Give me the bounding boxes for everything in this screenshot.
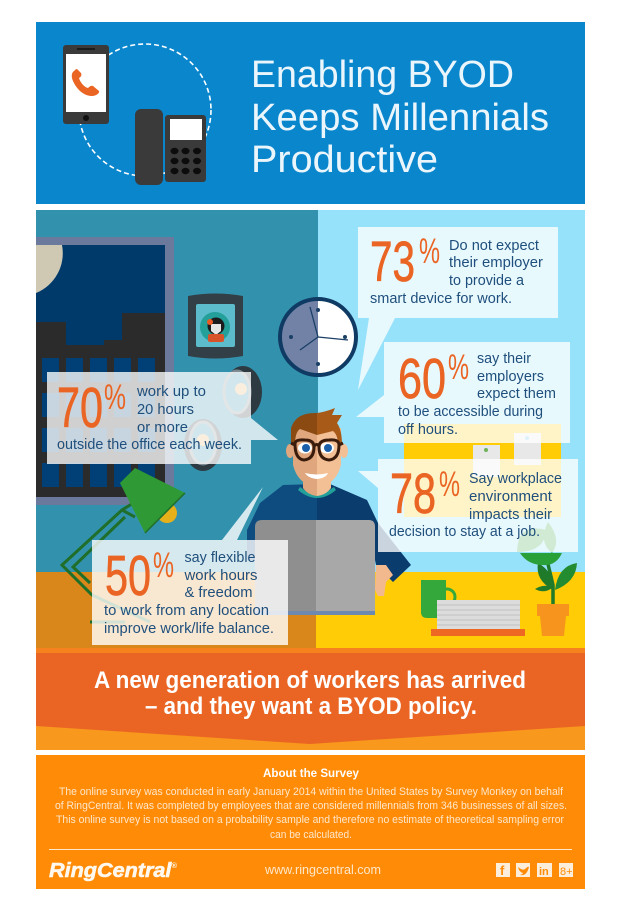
- glasses and eyes: [291, 440, 343, 460]
- callout: 60%: off hours.: [398, 422, 458, 438]
- title: [251, 54, 549, 181]
- social icons: in: [539, 866, 549, 878]
- wall clock: [280, 299, 356, 375]
- callout: 60%: [356, 342, 570, 443]
- banner: new generation of workers: – and they want a BYOD policy.: [145, 693, 477, 720]
- survey heading: About the Survey: [263, 766, 359, 780]
- callout: 70%: %: [104, 378, 126, 417]
- oval flower pictures: [184, 366, 262, 471]
- callout: 70%: outside the office each week.: [57, 437, 242, 453]
- callout: 70%: 20 hours: [137, 402, 194, 418]
- survey description: [55, 786, 567, 841]
- callout: 78%: environment: [469, 489, 552, 505]
- icon: smartphone: [63, 45, 109, 124]
- neck and head: [286, 408, 348, 496]
- callout: 78%: 78: [390, 462, 436, 526]
- hand: [375, 565, 393, 596]
- callout: 78%: [358, 459, 578, 552]
- smile: [305, 473, 328, 479]
- callout: 73%: smart device for work.: [370, 291, 512, 307]
- social icons: f: [500, 863, 505, 878]
- callout: 78%: Say workplace: [469, 471, 562, 487]
- survey description: of RingCentral. It was completed by employees that are considered millennials from 346 businesses of all sizes.: [55, 800, 567, 812]
- callout: 70%: [47, 372, 278, 464]
- yellow wall board with notes: [404, 424, 561, 517]
- banner: new generation of workers: [36, 653, 585, 750]
- callout: 50%: improve work/life balance.: [104, 621, 274, 637]
- dashed circle connecting phones: [79, 44, 211, 176]
- sweater: [247, 484, 411, 582]
- callout: 60%: 60: [398, 347, 446, 411]
- panel: office scene: [36, 210, 585, 654]
- title: Productive: [251, 139, 438, 181]
- survey description: can be calculated.: [270, 829, 352, 841]
- title: Keeps Millennials: [251, 97, 549, 139]
- callout: 50%: & freedom: [184, 585, 252, 601]
- callout: 60%: expect them: [477, 386, 556, 402]
- callout: 60%: employers: [477, 369, 544, 385]
- social icons: [496, 863, 573, 878]
- callout: 70%: 70: [57, 376, 103, 440]
- callout: 70%: or more: [137, 420, 188, 436]
- panel: header: [36, 22, 585, 204]
- panel: about the survey footer: [36, 755, 585, 889]
- callout: 50%: say flexible: [184, 550, 256, 566]
- callout: 50%: [92, 487, 288, 645]
- RingCentral logo: ®: [171, 862, 178, 870]
- person: [247, 408, 411, 615]
- callout: 70%: work up to: [136, 384, 206, 400]
- callout: 73%: to provide a: [449, 273, 525, 289]
- website link: www.ringcentral.com: [264, 862, 381, 877]
- callout: 78%: decision to stay at a job.: [389, 524, 540, 540]
- callout: 73%: [358, 227, 558, 390]
- callout: 50%: %: [153, 546, 174, 585]
- laptop: [255, 520, 375, 615]
- callout: 50%: to work from any location: [104, 603, 269, 619]
- callout: 78%: %: [439, 465, 460, 504]
- callout: 60%: %: [448, 348, 469, 387]
- callout: 50%: work hours: [183, 568, 258, 584]
- callout: 78%: impacts their: [469, 507, 552, 523]
- callout: 73%: %: [419, 232, 440, 271]
- framed portrait: [188, 294, 243, 358]
- callout: 73%: Do not expect: [449, 238, 539, 254]
- desk lamp: [62, 468, 185, 622]
- window with night skyline: [36, 237, 174, 505]
- callout: 73%: their employer: [449, 255, 543, 271]
- callout: 60%: say their: [477, 351, 531, 367]
- coffee mug and paper stack: [421, 580, 525, 636]
- callout: 60%: to be accessible during: [398, 404, 543, 420]
- RingCentral logo: RingCentral: [49, 860, 162, 882]
- callout: 73%: 73: [370, 230, 415, 294]
- survey description: The online survey was conducted in early January 2014 within the United States by Survey Monkey on behalf: [59, 786, 564, 798]
- banner: new generation of workers: A new generation of workers has arrived: [94, 667, 526, 694]
- plant: [517, 522, 577, 636]
- title: Enabling BYOD: [251, 54, 514, 96]
- icon: desk phone: [135, 109, 206, 185]
- callout: 50%: 50: [105, 544, 151, 608]
- social icons: 8+: [560, 866, 573, 878]
- survey description: This online survey is not based on a probability sample and therefore no estimate of theoretical sampling error: [56, 814, 564, 826]
